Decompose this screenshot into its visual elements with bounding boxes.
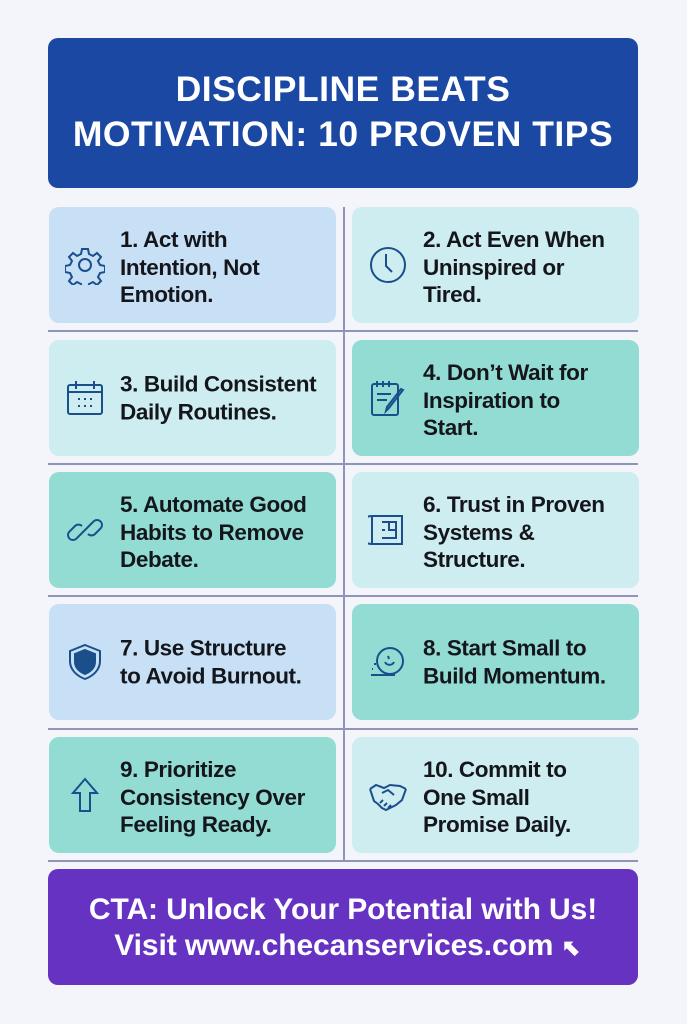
card 6: 6. Trust in Proven [423, 492, 605, 517]
card 5 [49, 472, 336, 588]
title: MOTIVATION: 10 PROVEN TIPS [73, 114, 613, 154]
icon: clock [370, 247, 406, 283]
card 6: Structure. [423, 547, 525, 572]
icon: shield [69, 644, 101, 680]
card 1 [49, 207, 336, 323]
icon: notepad pencil [371, 381, 404, 416]
title [48, 38, 638, 188]
cta banner [48, 869, 638, 985]
icon: snowball [371, 647, 404, 676]
card 7: 7. Use Structure [120, 636, 286, 660]
card 2: Tired. [423, 282, 481, 307]
card 4: Inspiration to [423, 387, 560, 412]
card 4: 4. Don’t Wait for [423, 360, 588, 385]
card 1: Intention, Not [120, 254, 259, 279]
icon: handshake [369, 784, 407, 812]
card 5: 5. Automate Good [120, 492, 307, 517]
icon: blueprint [368, 515, 403, 545]
cta banner: CTA: Unlock Your Potential with Us! [89, 893, 597, 926]
card 2 [352, 207, 639, 323]
card 6 [352, 472, 639, 588]
card 8: Build Momentum. [423, 663, 606, 688]
card 9 [49, 737, 336, 853]
icon: gear [65, 248, 105, 285]
card 4: Start. [423, 415, 478, 440]
card 8: 8. Start Small to [423, 636, 586, 660]
icon: calendar [67, 381, 103, 415]
card 3: 3. Build Consistent [120, 372, 316, 396]
icon: up arrow [70, 778, 100, 812]
card 2: Uninspired or [423, 254, 564, 279]
card 1: 1. Act with [120, 227, 227, 252]
card 10 [352, 737, 639, 853]
card 8 [352, 604, 639, 720]
icon: link [67, 519, 103, 541]
cta banner: Visit www.checanservices.com ⬉ [114, 929, 580, 962]
card 3: Daily Routines. [120, 399, 277, 424]
card 1: Emotion. [120, 282, 213, 307]
title: DISCIPLINE BEATS [176, 69, 510, 109]
card 5: Debate. [120, 547, 198, 572]
card 7 [49, 604, 336, 720]
card 10: Promise Daily. [423, 812, 571, 837]
card 10: One Small [423, 784, 529, 809]
card 9: 9. Prioritize [120, 757, 236, 782]
card 9: Consistency Over [120, 784, 305, 809]
card 9: Feeling Ready. [120, 812, 272, 837]
card 5: Habits to Remove [120, 519, 304, 544]
card 2: 2. Act Even When [423, 227, 605, 252]
card 4 [352, 340, 639, 456]
card 6: Systems & [423, 519, 534, 544]
card 3 [49, 340, 336, 456]
card 10: 10. Commit to [423, 757, 567, 782]
card 7: to Avoid Burnout. [120, 663, 302, 688]
